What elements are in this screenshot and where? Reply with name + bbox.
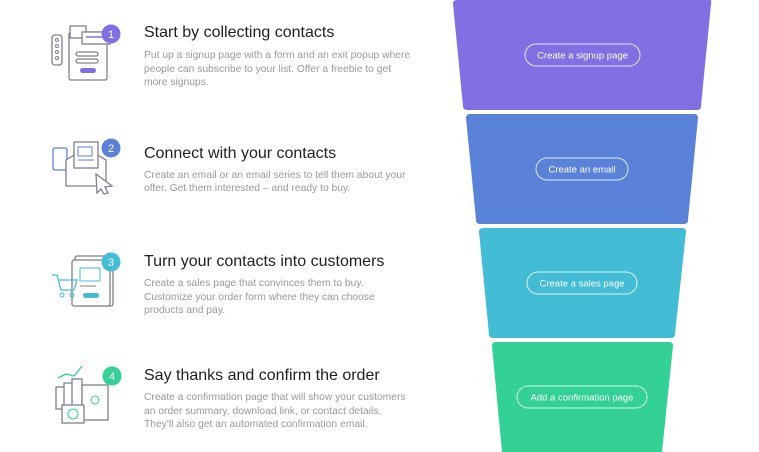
step 4 [56, 366, 406, 430]
funnel stage 1: Create a signup page [537, 50, 628, 62]
title 3: Turn your contacts into customers [144, 253, 384, 270]
icon: email [53, 142, 112, 194]
icon: signup form [52, 26, 110, 80]
badge 2: 2 [108, 143, 114, 155]
step 1 [52, 24, 410, 88]
step 4: They'll also get an automated confirmation email. [144, 419, 367, 430]
icon: sales page [52, 256, 113, 306]
step 1: people can subscribe to your list. Offer a freebie to get [144, 64, 391, 75]
badge 3: 3 [108, 257, 114, 269]
title 4: Say thanks and confirm the order [144, 367, 380, 384]
step 1: more signups. [144, 77, 209, 88]
badge 1 [102, 24, 120, 44]
body 1: Put up a signup page with a form and an exit popup where [144, 50, 410, 61]
step 4: an order summary, download link, or contact details. [144, 406, 381, 417]
icon: confirmation [56, 366, 108, 423]
step 3: products and pay. [144, 305, 225, 316]
title 2: Connect with your contacts [144, 145, 336, 162]
body 4: Create a confirmation page that will show your customers [144, 392, 406, 403]
step 2: offer. Get them interested – and ready to buy. [144, 183, 350, 194]
step 3 [52, 252, 384, 316]
badge 3 [102, 252, 120, 272]
funnel stage 1 [453, 0, 711, 110]
badge 4 [102, 366, 122, 386]
funnel stage 2: Create an email [548, 164, 616, 176]
funnel stage 2 [466, 114, 698, 224]
body 2: Create an email or an email series to tell them about your [144, 170, 406, 181]
step 2 [53, 138, 406, 194]
funnel stage 4 [492, 342, 673, 452]
funnel [453, 0, 711, 452]
funnel stage 3 [479, 228, 686, 338]
funnel stage 3: Create a sales page [539, 278, 625, 290]
step 3: Customize your order form where they can choose [144, 292, 375, 303]
badge 4: 4 [109, 371, 115, 383]
funnel stage 4: Add a confirmation page [531, 392, 633, 404]
body 3: Create a sales page that convinces them to buy. [144, 278, 364, 289]
badge 2 [102, 138, 120, 158]
title 1: Start by collecting contacts [144, 24, 334, 41]
badge 1: 1 [108, 29, 114, 41]
